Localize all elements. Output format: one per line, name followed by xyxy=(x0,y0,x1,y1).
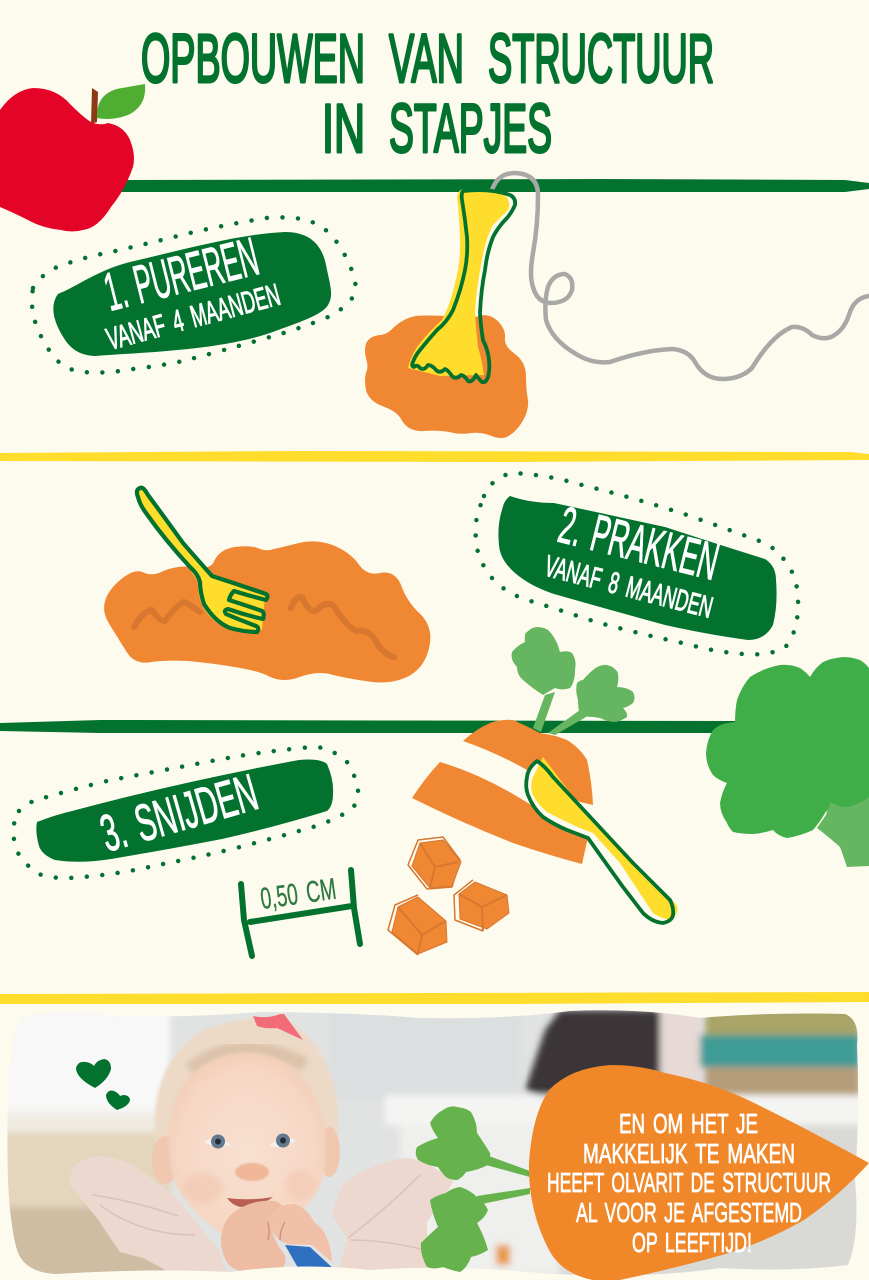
icon: broccoli xyxy=(706,657,869,867)
icon: hearts xyxy=(76,1059,130,1110)
divider line green top xyxy=(120,179,869,192)
divider line yellow bottom xyxy=(0,992,869,1004)
panel: step 2 badge xyxy=(475,473,798,654)
illustration: carrot with knife xyxy=(412,627,678,923)
divider line green middle xyxy=(0,720,740,733)
panel: step 2 badge: 2. PRAKKEN xyxy=(553,496,724,592)
panel: step 1 badge xyxy=(32,217,356,373)
title: IN xyxy=(322,90,365,167)
face xyxy=(169,1052,326,1236)
face features xyxy=(204,1138,231,1146)
callout: carrot with text xyxy=(416,1065,869,1280)
divider line yellow xyxy=(0,451,869,462)
hair and ears xyxy=(155,1018,338,1150)
photo: baby xyxy=(0,1000,869,1280)
illustration: carrot cubes xyxy=(388,837,509,955)
icon: apple xyxy=(0,84,145,232)
callout: carrot with text: OP LEEFTIJD! xyxy=(632,1227,752,1258)
panel: step 1 badge: VANAF 4 MAANDEN xyxy=(103,277,284,357)
hands xyxy=(221,1201,285,1274)
bow xyxy=(253,1014,303,1040)
spoon xyxy=(285,1245,332,1268)
illustration: ruler 0,50 cm: 0,50 CM xyxy=(258,873,338,916)
title: OPBOUWEN xyxy=(141,20,365,97)
panel: step 2 badge: VANAF 8 MAANDEN xyxy=(541,550,716,625)
panel: step 1 badge: 1. PUREREN xyxy=(98,227,264,323)
illustration: mashed carrot with fork xyxy=(107,486,427,679)
illustration: puree with spoon and cord xyxy=(367,173,869,436)
title: VAN xyxy=(389,20,464,97)
title xyxy=(141,20,714,167)
bib xyxy=(70,1156,227,1274)
callout: carrot with text: EN OM HET JE xyxy=(619,1108,758,1139)
illustration: ruler 0,50 cm xyxy=(241,870,360,956)
step 3 label: 3. SNIJDEN xyxy=(94,764,264,864)
panel: step 3 badge xyxy=(14,747,358,878)
title: STAPJES xyxy=(389,90,552,167)
